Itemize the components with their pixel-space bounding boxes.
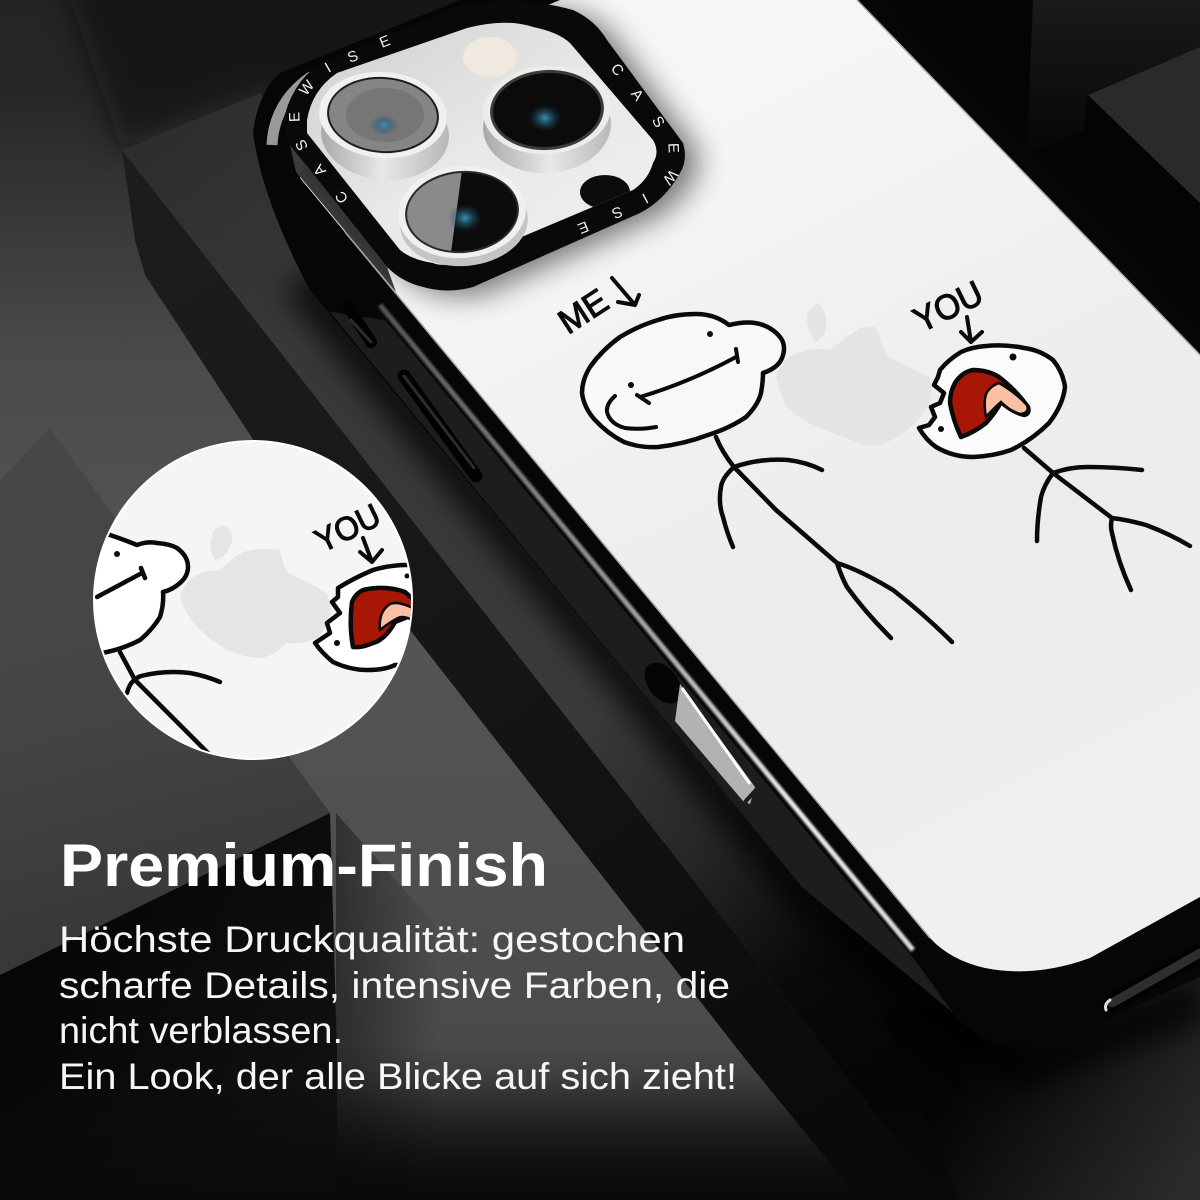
- rear white panel: [300, 0, 1200, 971]
- inset magnifier circle: [70, 440, 425, 760]
- CASEWISE rim text right: E: [575, 217, 591, 237]
- eyes you: [938, 354, 1016, 432]
- head me: [582, 314, 784, 447]
- microphone hole: [580, 175, 630, 209]
- CASEWISE rim text left: S: [292, 137, 312, 153]
- CASEWISE rim text left: I: [322, 60, 334, 76]
- flash: [463, 37, 517, 77]
- body copy: Höchste Druckqualität: gestochen: [59, 919, 685, 960]
- right upper backdrop: [857, 0, 1200, 370]
- camera shadow on panel: [297, 7, 699, 296]
- bottom-right floor shade: [880, 960, 1200, 1200]
- heading: Premium-Finish: [60, 832, 548, 899]
- bump frame: [283, 1, 685, 290]
- CASEWISE rim text left: E: [286, 112, 304, 122]
- apple logo: [776, 303, 932, 445]
- label ME: ME: [552, 282, 615, 342]
- lens 3: [400, 169, 528, 266]
- phone case shadow: [300, 280, 1200, 1070]
- inset body me: [120, 652, 220, 755]
- CASEWISE rim text right: [575, 60, 682, 237]
- tongue you: [985, 383, 1028, 417]
- camera button silver: [675, 684, 756, 804]
- main block side face: [122, 150, 944, 1200]
- phone case body: [253, 0, 1200, 1047]
- strip between ring and panel edge: [290, 145, 396, 292]
- CASEWISE rim text right: A: [627, 86, 647, 104]
- lens 2: [480, 62, 614, 177]
- silver edge shine: [380, 305, 913, 950]
- CASEWISE rim text left: A: [310, 161, 330, 179]
- mouth you: [950, 370, 1028, 437]
- CASEWISE rim text right: E: [664, 143, 682, 153]
- side port: [637, 656, 689, 710]
- side glossy band: [330, 312, 953, 1013]
- face me: [607, 331, 738, 429]
- small side switch: [349, 308, 371, 342]
- CASEWISE rim text left: C: [332, 187, 352, 207]
- CASEWISE rim text right: I: [639, 190, 651, 206]
- arrow you: [961, 317, 982, 342]
- CASEWISE rim text left: S: [345, 47, 361, 67]
- camera bump: [272, 1, 685, 290]
- arrow me: [612, 278, 639, 305]
- inset head me: [95, 532, 190, 655]
- body copy: [59, 919, 737, 1097]
- CASEWISE rim text left: W: [296, 76, 319, 99]
- stick figure: me: [552, 278, 952, 642]
- head you: [919, 345, 1065, 457]
- CASEWISE rim text right: S: [609, 202, 625, 222]
- inset apple logo: [180, 525, 331, 658]
- CASEWISE rim text left: [286, 32, 393, 207]
- phone: [253, 0, 1200, 1070]
- panel thin grey edge: [345, 0, 1200, 938]
- body copy: scharfe Details, intensive Farben, die: [59, 965, 730, 1006]
- lens 1: [316, 68, 452, 184]
- text block: [59, 832, 737, 1097]
- outer grey strip: [272, 76, 312, 145]
- body copy: Ein Look, der alle Blicke auf sich zieht!: [59, 1056, 737, 1097]
- inset eyes you: [334, 574, 410, 646]
- CASEWISE rim text right: C: [607, 60, 627, 80]
- body me: [716, 437, 952, 642]
- lower-left step block: [0, 428, 440, 1200]
- inset face me: [97, 551, 145, 597]
- inset arrow: [360, 538, 382, 562]
- volume button: [404, 376, 476, 476]
- bottom fade: [0, 1080, 1200, 1200]
- body copy: nicht verblassen.: [59, 1010, 343, 1051]
- label YOU: YOU: [908, 274, 989, 340]
- inset label YOU: YOU: [309, 497, 386, 559]
- CASEWISE rim text left: E: [377, 32, 393, 52]
- inset head you: [315, 565, 425, 670]
- CASEWISE rim text right: S: [648, 113, 668, 131]
- CASEWISE rim text right: W: [658, 166, 681, 189]
- body you: [1024, 448, 1190, 590]
- stick figure: you: [908, 274, 1190, 590]
- bottom port: [1106, 953, 1200, 1010]
- glass plate: [307, 23, 656, 265]
- inset mouth you: [351, 588, 425, 647]
- inset tongue you: [380, 603, 420, 630]
